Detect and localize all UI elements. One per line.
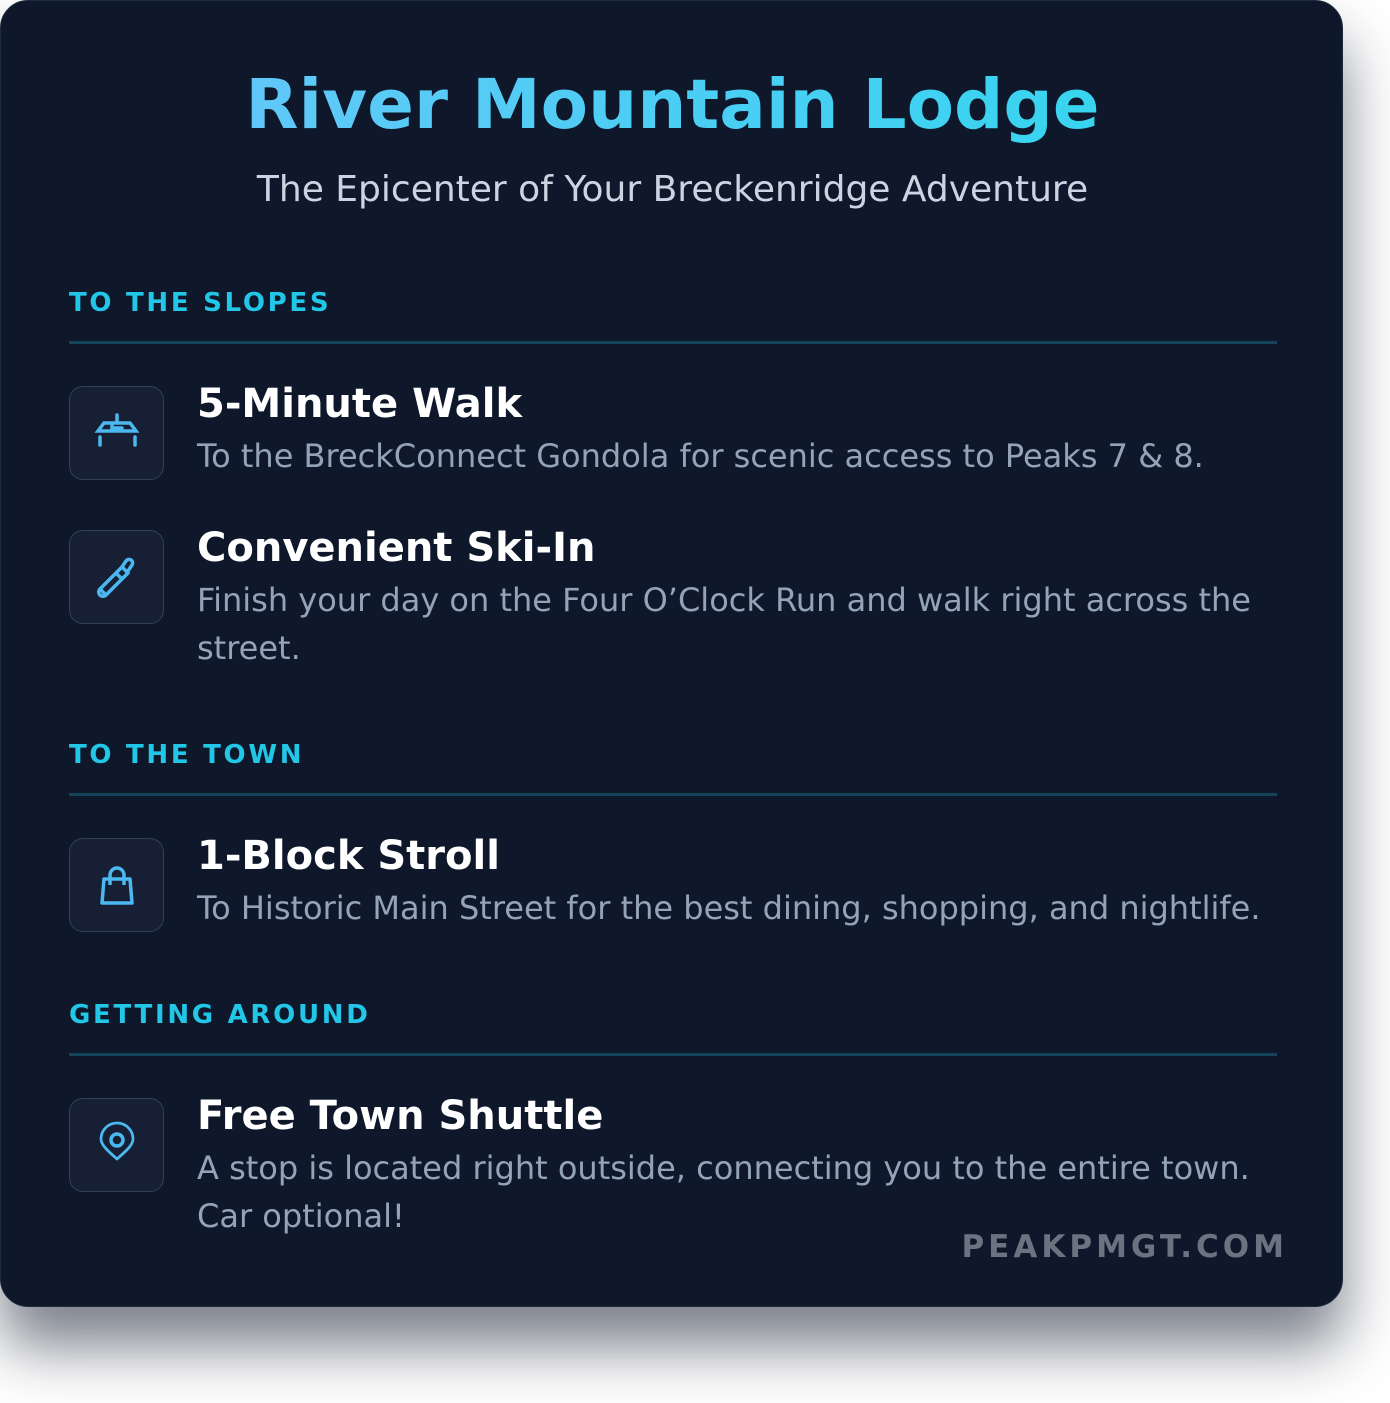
icon: ski xyxy=(69,530,164,624)
watermark: PEAKPMGT.COM xyxy=(961,1229,1288,1265)
desc xyxy=(197,1149,1250,1235)
desc: A stop is located right outside, connecting you to the entire town. xyxy=(197,1149,1250,1187)
subtitle: The Epicenter of Your Breckenridge Adventure xyxy=(257,169,1088,210)
item: free shuttle: Free Town Shuttle xyxy=(197,1093,603,1139)
section heading: to the slopes: TO THE SLOPES xyxy=(69,288,331,318)
item: 5-minute walk: 5-Minute Walk xyxy=(197,381,522,427)
icon: gondola xyxy=(69,386,164,480)
desc: Car optional! xyxy=(197,1197,405,1235)
desc: Finish your day on the Four O’Clock Run and walk right across the street. xyxy=(197,581,1251,667)
desc: To Historic Main Street for the best dining, shopping, and nightlife. xyxy=(197,889,1261,927)
icon: map pin xyxy=(69,1098,164,1192)
desc: To the BreckConnect Gondola for scenic access to Peaks 7 & 8. xyxy=(197,437,1204,475)
item: ski-in: Convenient Ski-In xyxy=(197,525,595,571)
section heading: getting around: GETTING AROUND xyxy=(69,1000,370,1030)
section heading: to the town: TO THE TOWN xyxy=(69,740,304,770)
item: 1-block stroll: 1-Block Stroll xyxy=(197,833,500,879)
title: River Mountain Lodge xyxy=(245,65,1100,145)
icon: shopping bag xyxy=(69,838,164,932)
